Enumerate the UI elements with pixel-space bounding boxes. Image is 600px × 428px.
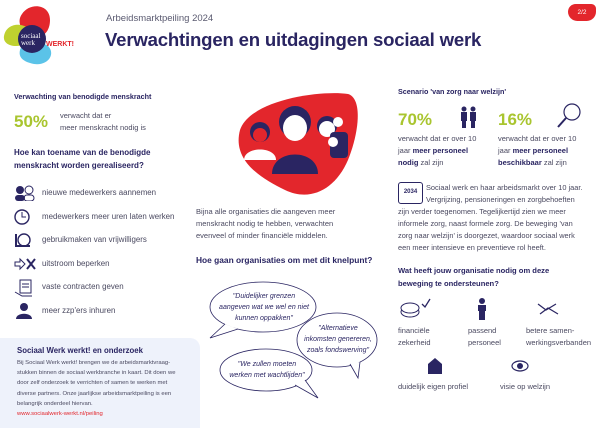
panel: Sociaal Werk werkt! en onderzoek: diverse partners. Onze jaarlijkse arbeidsmarktpeiling is een [17, 391, 171, 397]
quote 3: werken met wachtlijden" [229, 372, 305, 379]
text: financial: evenveel of minder financiële middelen. [196, 231, 328, 240]
item 3: gebruikmaken van vrijwilligers [42, 235, 147, 244]
text: financial [196, 207, 336, 240]
need 5 [500, 360, 550, 391]
paragraph: een meer intensieve en preventieve rol heeft. [398, 243, 546, 252]
stat 16%: jaar meer personeel [498, 146, 568, 155]
panel: Sociaal Werk werkt! en onderzoek: Sociaal Werk werkt! en onderzoek [17, 346, 143, 355]
quote 2: inkomsten genereren, [304, 336, 372, 343]
heading: menskracht: Verwachting van benodigde menskracht [14, 92, 151, 101]
quote 2: zoals fondswerving" [307, 347, 369, 354]
heading: scenario: Scenario 'van zorg naar welzijn' [398, 87, 506, 96]
page badge [568, 4, 596, 21]
panel: Sociaal Werk werkt! en onderzoek: belangrijk onderdeel hiervan. [17, 401, 93, 407]
paragraph: Vergrijzing, pensioneringen en zorgbehoeften [426, 195, 575, 204]
panel: Sociaal Werk werkt! en onderzoek: www.sociaalwerk-werkt.nl/peiling [17, 411, 103, 417]
quote 3: "We zullen moeten [238, 361, 296, 368]
paragraph: zorg naar welzijn' is doorgezet, waardoor sociaal werk [398, 231, 575, 240]
logo: werk [21, 39, 35, 47]
heading: hoe toename: menskracht worden gerealiseerd? [14, 161, 144, 170]
need 2: passend [468, 326, 496, 335]
speech bubbles [210, 282, 378, 398]
logo: WERKT! [46, 41, 74, 48]
panel: Sociaal Werk werkt! en onderzoek [0, 338, 200, 428]
illustration: people on red blob [238, 93, 358, 195]
paragraph: zijn verder toegenomen. Tegelijkertijd zien we meer [398, 207, 566, 216]
icon: calendar 2034: 2034 [404, 189, 417, 195]
stat 16%: beschikbaar zal zijn [498, 158, 567, 167]
subtitle: Arbeidsmarktpeiling 2024 [106, 13, 213, 24]
quote 3 [229, 360, 305, 379]
page badge: 2/2 [577, 9, 587, 16]
list [14, 186, 174, 319]
item 4: uitstroom beperken [42, 259, 110, 268]
need 1 [398, 298, 431, 347]
logo: sociaal [21, 32, 40, 40]
item 5 [14, 280, 124, 296]
item 6 [16, 303, 115, 319]
panel: Sociaal Werk werkt! en onderzoek: door zelf onderzoek te verrichten of samen te werken met [17, 380, 167, 386]
stat 16%: 16% [498, 110, 532, 129]
item 4 [14, 258, 110, 270]
panel: right scenario [398, 87, 591, 391]
item 2 [14, 209, 174, 225]
item 3 [15, 233, 147, 247]
need 3: werkingsverbanden [526, 338, 591, 347]
stat 16%: verwacht dat er over 10 [498, 134, 576, 143]
heading: wat heeft: Wat heeft jouw organisatie nodig om deze [398, 266, 549, 275]
quote 1 [219, 292, 310, 322]
heading: knelpunt: Hoe gaan organisaties om met dit knelpunt? [196, 255, 372, 265]
quote 1: "Duidelijker grenzen [233, 293, 295, 300]
panel: Sociaal Werk werkt! en onderzoek: stukken binnen de sociaal werkbranche in kaart. Dit doen we [17, 370, 175, 376]
logo [4, 6, 74, 64]
quote 2: "Alternatieve [318, 325, 358, 332]
stat 70% [398, 106, 476, 167]
item 5: vaste contracten geven [42, 282, 124, 291]
stat 70%: 70% [398, 110, 432, 129]
panel: Sociaal Werk werkt! en onderzoek: Bij Sociaal Werk werkt! brengen we de arbeidsmarktvraag- [17, 360, 170, 366]
heading: wat heeft [398, 266, 549, 288]
stat 50%: 50% [14, 112, 48, 131]
stat 50%: verwacht dat er [60, 111, 111, 120]
paragraph [398, 183, 583, 252]
item 6: meer zzp'ers inhuren [42, 306, 115, 315]
quote 1: aangeven wat we wel en niet [219, 304, 309, 311]
stat 16% [498, 103, 581, 167]
need 3: betere samen- [526, 326, 574, 335]
text: financial: menskracht nodig te hebben, verwachten [196, 219, 333, 228]
need 1: zekerheid [398, 338, 431, 347]
stat 70%: nodig zal zijn [398, 158, 443, 167]
item 1: nieuwe medewerkers aannemen [42, 188, 156, 197]
heading: wat heeft: beweging te ondersteunen? [398, 278, 499, 288]
paragraph: Sociaal werk en haar arbeidsmarkt over 10 jaar. [426, 183, 583, 192]
need 5: visie op welzijn [500, 382, 550, 391]
quote 2 [304, 324, 372, 354]
stat 70%: jaar meer personeel [398, 146, 468, 155]
need 3 [526, 304, 591, 347]
need 2 [468, 298, 501, 347]
need 4: duidelijk eigen profiel [398, 382, 468, 391]
need 4 [398, 358, 468, 391]
need 2: personeel [468, 338, 501, 347]
heading: hoe toename [14, 148, 150, 170]
title: Verwachtingen en uitdagingen sociaal werk [105, 29, 481, 50]
quote 1: kunnen oppakken" [235, 315, 293, 322]
item 1 [15, 186, 156, 201]
panel: left [14, 92, 174, 319]
stat 50% [14, 111, 146, 132]
needs grid [398, 298, 591, 391]
paragraph: informele zorg, naast formele zorg. De beweging 'van [398, 219, 573, 228]
heading: hoe toename: Hoe kan toename van de benodigde [14, 148, 150, 157]
stat 70%: verwacht dat er over 10 [398, 134, 476, 143]
item 2: medewerkers meer uren laten werken [42, 212, 174, 221]
text: financial: Bijna alle organisaties die aangeven meer [196, 207, 335, 216]
need 1: financiële [398, 326, 430, 335]
icon: calendar 2034 [398, 182, 423, 204]
stat 50%: meer menskracht nodig is [60, 123, 146, 132]
